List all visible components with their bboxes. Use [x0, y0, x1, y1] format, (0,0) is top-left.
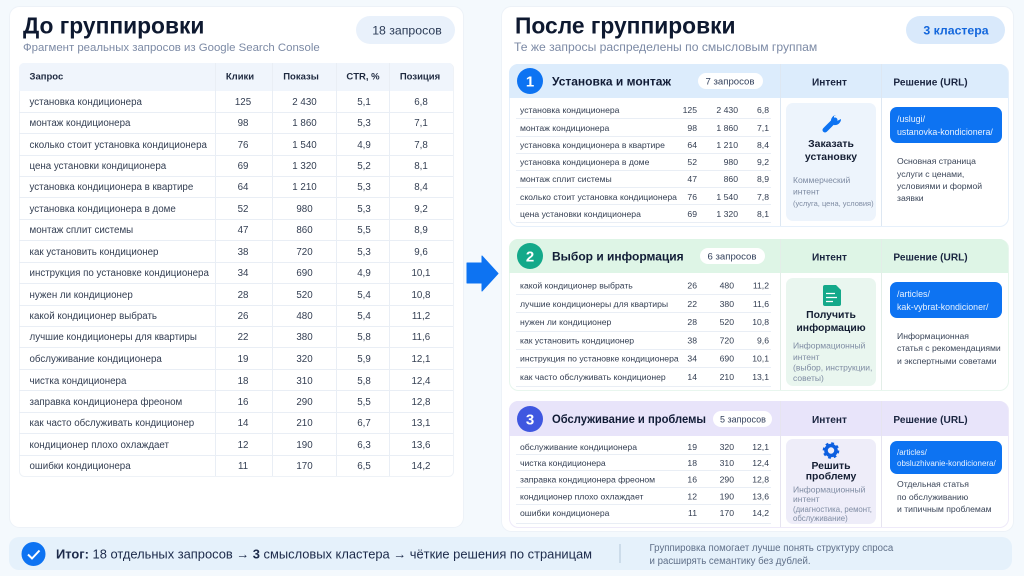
cluster 2: choice and information	[509, 239, 1008, 390]
number badge 2: 2	[526, 248, 534, 266]
query table 2: 480	[720, 280, 734, 290]
row 11: 11,2	[412, 311, 430, 322]
row 6: 52	[238, 204, 248, 215]
intent card 2: (выбор, инструкции,	[793, 362, 872, 372]
badge: 3 clusters: 3 кластера	[923, 24, 989, 38]
query table 3: кондиционер плохо охлаждает	[520, 492, 643, 502]
query count 1: 7 запросов	[706, 76, 754, 88]
row 14: 310	[296, 376, 313, 387]
row 9: 34	[238, 268, 249, 279]
query table 1: монтаж сплит системы	[520, 174, 612, 184]
row 15: 12,8	[412, 397, 430, 408]
query table 2: 520	[720, 317, 734, 327]
row 9	[30, 268, 430, 279]
row 3: 76	[238, 140, 248, 151]
intent card 2: Получить	[806, 310, 856, 321]
row 2: 1 860	[292, 118, 317, 129]
row 3: 1 540	[292, 140, 317, 151]
query table 1: 98	[687, 123, 697, 133]
subtitle: after grouping: Те же запросы распределены по смысловым группам	[514, 40, 817, 54]
solution 1: услуги с ценами,	[897, 169, 964, 179]
query table 2: нужен ли кондиционер	[520, 317, 612, 327]
solution 1: заявки	[897, 193, 924, 203]
badge: 18 queries: 18 запросов	[372, 24, 442, 38]
query count 3	[713, 411, 772, 427]
query table 1: установка кондиционера	[520, 105, 620, 115]
intent card 3: обслуживание)	[793, 514, 848, 523]
query table 3: 19	[687, 442, 697, 452]
summary note	[650, 543, 894, 567]
row 10: 5,4	[357, 290, 371, 301]
column headers 3: Интент	[812, 415, 847, 426]
query table 3: 12,4	[752, 458, 769, 468]
row 1: 125	[235, 97, 252, 108]
row 8: 38	[238, 247, 248, 258]
query table 1: 1 860	[716, 123, 738, 133]
intent card 2: советы)	[793, 373, 824, 383]
row 11: 480	[296, 311, 313, 322]
row 13: 320	[296, 354, 313, 365]
query table 2: 380	[720, 299, 734, 309]
intent card 3: интент	[793, 494, 820, 504]
row 4: 8,1	[414, 161, 428, 172]
row 8: 5,3	[357, 247, 371, 258]
query table 1: 8,1	[757, 209, 769, 219]
query table 3: 12,8	[752, 474, 769, 484]
column headers 2: Решение (URL)	[893, 252, 968, 264]
row 17: 190	[296, 440, 313, 451]
row 4: цена установки кондиционера	[30, 161, 167, 172]
row 7: 8,9	[414, 225, 428, 236]
row 5: 8,4	[414, 182, 428, 193]
row 18	[30, 461, 430, 472]
row 15: 290	[296, 397, 313, 408]
intent card 1: Коммерческий	[793, 175, 851, 185]
row 6: 5,3	[357, 204, 371, 215]
query table 3: обслуживание кондиционера	[520, 442, 637, 452]
row 8: как установить кондиционер	[30, 247, 159, 258]
row 1: 5,1	[357, 97, 371, 108]
number badge 1: 1	[526, 74, 534, 90]
query table 1: 52	[687, 157, 697, 167]
row 14: чистка кондиционера	[30, 376, 127, 387]
row 6: установка кондиционера в доме	[30, 204, 176, 215]
query table 3	[516, 442, 771, 524]
column headers 1	[812, 78, 968, 88]
row 7: 860	[296, 225, 313, 236]
row 18: ошибки кондиционера	[30, 461, 131, 472]
solution 3	[890, 441, 1002, 514]
row 7	[30, 225, 428, 236]
row 18: 170	[296, 461, 313, 472]
row 12: 22	[238, 332, 248, 343]
row 4: 69	[238, 161, 248, 172]
row 10	[30, 290, 430, 301]
row 11	[30, 311, 430, 322]
row 9: 690	[296, 268, 313, 279]
row 15	[30, 397, 430, 408]
query table 3: 190	[720, 492, 734, 502]
intent card 1: интент	[793, 186, 820, 196]
row 13: 12,1	[412, 354, 430, 365]
query count 3: 5 запросов	[720, 414, 766, 424]
row 17: 12	[238, 440, 248, 451]
query table 2: 11,2	[753, 280, 769, 290]
summary text: Итог: 18 отдельных запросов → 3 смысловых кластера → чёткие решения по страницам	[56, 546, 592, 562]
query table 2: 22	[687, 299, 697, 309]
solution 2: Информационная	[897, 331, 969, 341]
row 2: 98	[238, 118, 248, 129]
row 16: как часто обслуживать кондиционер	[30, 418, 195, 429]
column headers 2: Интент	[812, 252, 847, 264]
column headers 3	[812, 415, 968, 426]
row 2: 5,3	[357, 118, 371, 129]
row 14	[30, 376, 431, 387]
query table 2: как установить кондиционер	[520, 336, 634, 346]
solution 2: kak-vybrat-kondicioner/	[897, 302, 989, 312]
row 11: 26	[238, 311, 248, 322]
row 16: 14	[238, 418, 249, 429]
summary note: и расширять семантику без дублей.	[650, 556, 811, 567]
row 13: 5,9	[357, 354, 371, 365]
solution 3: и типичным проблемам	[897, 504, 992, 514]
query table 3: 11	[688, 508, 697, 518]
query table 2: 210	[720, 372, 734, 382]
query table 2: 34	[687, 354, 697, 364]
query table 2: 10,8	[752, 317, 769, 327]
solution 2: и экспертными советами	[897, 356, 997, 366]
intent card 1: (услуга, цена, условия)	[793, 199, 874, 208]
row 1	[30, 97, 428, 108]
panel: before grouping	[10, 6, 464, 528]
query table 1: 64	[687, 140, 697, 150]
solution 1: /uslugi/	[897, 114, 926, 124]
row 7: 47	[238, 225, 248, 236]
panel: after grouping	[502, 6, 1014, 532]
query table 1: 6,8	[757, 105, 769, 115]
intent card 3: (диагностика, ремонт,	[793, 505, 872, 514]
arrow: before to after	[467, 256, 498, 291]
query table 2: как часто обслуживать кондиционер	[520, 372, 666, 382]
query table 1: 9,2	[757, 157, 769, 167]
row 1: 6,8	[414, 97, 428, 108]
row 13	[30, 354, 430, 365]
query table 1: 8,4	[757, 140, 769, 150]
row 8: 720	[296, 247, 313, 258]
row 17: 13,6	[412, 440, 430, 451]
query table 1	[516, 105, 771, 222]
query table 1: 47	[687, 174, 697, 184]
query table 1: 125	[683, 105, 697, 115]
intent card 2: интент	[793, 352, 820, 362]
row 15: 16	[238, 397, 248, 408]
heading: after grouping: После группировки	[515, 12, 736, 38]
query count 1	[698, 73, 763, 89]
summary bar	[9, 537, 1012, 570]
intent card 1: установку	[805, 152, 857, 163]
row 10: 10,8	[412, 290, 430, 301]
solution 3: по обслуживанию	[897, 492, 969, 502]
table header: Клики	[226, 72, 254, 82]
number badge 2	[517, 243, 543, 269]
number badge 3: 3	[526, 412, 534, 428]
row 17: кондиционер плохо охлаждает	[30, 440, 170, 451]
number badge 3	[517, 406, 543, 432]
row 7: монтаж сплит системы	[30, 225, 133, 236]
row 3: 7,8	[414, 140, 428, 151]
table header: Запрос	[30, 72, 63, 82]
query table 3: чистка кондиционера	[520, 458, 606, 468]
intent card 2: информацию	[796, 322, 866, 334]
query table 2: 38	[687, 336, 697, 346]
cluster 3: maintenance and problems	[509, 401, 1008, 528]
badge: 3 clusters	[906, 16, 1005, 44]
query table 2	[516, 280, 771, 386]
query table 2: какой кондиционер выбрать	[520, 280, 633, 290]
table header: Позиция	[400, 72, 440, 82]
intent card 3: Решить	[812, 461, 850, 472]
query table 1: 860	[724, 174, 738, 184]
row 12	[30, 332, 430, 343]
summary note: Группировка помогает лучше понять структуру спроса	[650, 543, 894, 554]
row 14: 5,8	[357, 376, 371, 387]
row 1: 2 430	[292, 97, 317, 108]
query table 2: 9,6	[757, 336, 769, 346]
query table 2: 720	[720, 336, 734, 346]
query table 2: 28	[687, 317, 697, 327]
column headers 3: Решение (URL)	[893, 415, 968, 426]
row 5: установка кондиционера в квартире	[30, 182, 193, 193]
query table 3: 18	[687, 458, 697, 468]
row 12: 11,6	[412, 332, 430, 343]
solution 1: условиями и формой	[897, 181, 982, 191]
row 4: 5,2	[357, 161, 371, 172]
row 14: 18	[238, 376, 248, 387]
solution 1	[890, 107, 1002, 203]
row 15: заправка кондиционера фреоном	[30, 397, 183, 408]
column headers 2	[812, 252, 968, 264]
row 15: 5,5	[357, 397, 371, 408]
query table 2: 11,6	[753, 299, 769, 309]
intent card 1: Заказать	[808, 139, 854, 150]
query table 1: 8,9	[757, 174, 769, 184]
row 4: 1 320	[292, 161, 317, 172]
row 5: 5,3	[357, 182, 371, 193]
query table 3: 12	[687, 492, 697, 502]
row 4	[30, 161, 428, 172]
row 13: обслуживание кондиционера	[30, 354, 162, 365]
cluster 1: installation	[509, 64, 1008, 226]
row 6: 980	[296, 204, 313, 215]
table header: CTR, %	[346, 72, 380, 82]
query table 3: 310	[720, 458, 734, 468]
solution 2: статья с рекомендациями	[897, 343, 1001, 353]
icon: document	[823, 285, 841, 306]
query table 2: 13,1	[752, 372, 769, 382]
row 7: 5,5	[357, 225, 371, 236]
solution 1: Основная страница	[897, 156, 976, 166]
subtitle: before grouping: Фрагмент реальных запросов из Google Search Console	[23, 42, 320, 54]
row 18: 14,2	[412, 461, 430, 472]
cluster title 1: Установка и монтаж	[552, 74, 671, 88]
row 2: 7,1	[414, 118, 428, 129]
query table 3: 16	[687, 474, 697, 484]
icon: gear	[824, 443, 838, 458]
row 9: 4,9	[357, 268, 371, 279]
query table 1: цена установки кондиционера	[520, 209, 641, 219]
query table 1: 2 430	[716, 105, 738, 115]
table header	[30, 72, 440, 82]
row 16: 6,7	[357, 418, 371, 429]
query table 2: 26	[687, 280, 697, 290]
query table 2: инструкция по установке кондиционера	[520, 354, 679, 364]
query table 2: лучшие кондиционеры для квартиры	[520, 299, 668, 309]
row 10: 520	[296, 290, 313, 301]
query table 1: 1 210	[716, 140, 738, 150]
query table 1: 7,1	[757, 123, 769, 133]
intent card 3	[786, 439, 876, 524]
row 2: монтаж кондиционера	[30, 118, 131, 129]
intent card 2: Информационный	[793, 340, 866, 350]
query count 2: 6 запросов	[708, 252, 756, 262]
intent card 1	[786, 103, 876, 221]
column headers 1: Решение (URL)	[893, 78, 968, 88]
row 16: 210	[296, 418, 313, 429]
row 12: 380	[296, 332, 313, 343]
table header: Показы	[283, 72, 319, 82]
row 14: 12,4	[412, 376, 431, 387]
row 8: 9,6	[414, 247, 428, 258]
query table 1: 1 320	[716, 209, 738, 219]
row 3	[30, 140, 428, 151]
row 17: 6,3	[357, 440, 371, 451]
row 13: 19	[238, 354, 248, 365]
query table 3: 170	[720, 508, 734, 518]
query table 3: 14,2	[752, 508, 769, 518]
row 11: 5,4	[357, 311, 371, 322]
row 16: 13,1	[412, 418, 430, 429]
solution 3: /articles/	[897, 448, 928, 457]
cluster title 2: Выбор и информация	[552, 250, 684, 264]
solution 3: obsluzhivanie-kondicionera/	[897, 459, 997, 468]
query table 1: 7,8	[757, 192, 769, 202]
row 18: 6,5	[357, 461, 371, 472]
query table 3: 12,1	[752, 442, 769, 452]
row 9: инструкция по установке кондиционера	[30, 268, 209, 279]
query table 1: монтаж кондиционера	[520, 123, 609, 133]
cluster title 3: Обслуживание и проблемы	[552, 412, 706, 426]
solution 2: /articles/	[897, 289, 930, 299]
query count 2	[700, 248, 765, 264]
intent card 3: проблему	[806, 470, 857, 482]
row 8	[30, 247, 428, 258]
solution 3: Отдельная статья	[897, 479, 969, 489]
icon: check	[22, 542, 46, 566]
query table 1: установка кондиционера в доме	[520, 157, 650, 167]
row 6	[30, 204, 428, 215]
query table 3: заправка кондиционера фреоном	[520, 474, 655, 484]
row 16	[30, 418, 430, 429]
intent card 2	[786, 278, 876, 386]
query table 1: 76	[687, 192, 697, 202]
query table 1: сколько стоит установка кондиционера	[520, 192, 677, 202]
row 10: нужен ли кондиционер	[30, 290, 133, 301]
table: raw queries	[19, 63, 454, 476]
row 2	[30, 118, 428, 129]
row 11: какой кондиционер выбрать	[30, 311, 157, 322]
row 12: лучшие кондиционеры для квартиры	[30, 332, 197, 343]
column headers 1: Интент	[812, 78, 847, 88]
query table 2: 690	[720, 354, 734, 364]
row 5: 1 210	[292, 182, 317, 193]
row 1: установка кондиционера	[30, 97, 143, 108]
row 10: 28	[238, 290, 248, 301]
query table 1: 69	[687, 209, 697, 219]
solution 2	[890, 282, 1002, 366]
row 5: 64	[238, 182, 249, 193]
heading: before grouping: До группировки	[23, 12, 204, 38]
query table 2: 10,1	[752, 354, 769, 364]
row 3: сколько стоит установка кондиционера	[30, 140, 208, 151]
query table 2: 14	[687, 372, 697, 382]
query table 3: 320	[720, 442, 734, 452]
query table 1: установка кондиционера в квартире	[520, 140, 665, 150]
row 18: 11	[238, 461, 248, 472]
row 9: 10,1	[412, 268, 430, 279]
query table 3: 290	[720, 474, 734, 484]
row 17	[30, 440, 430, 451]
intent card 3: Информационный	[793, 484, 866, 494]
row 5	[30, 182, 428, 193]
query table 1: 1 540	[716, 192, 738, 202]
row 3: 4,9	[357, 140, 371, 151]
query table 3: 13,6	[752, 492, 769, 502]
solution 1: ustanovka-kondicionera/	[897, 127, 993, 137]
row 6: 9,2	[414, 204, 428, 215]
query table 3: ошибки кондиционера	[520, 508, 610, 518]
badge: 18 queries	[356, 16, 455, 44]
query table 1: 980	[724, 157, 738, 167]
icon: wrench	[825, 115, 841, 130]
number badge 1	[517, 68, 543, 94]
row 12: 5,8	[357, 332, 371, 343]
